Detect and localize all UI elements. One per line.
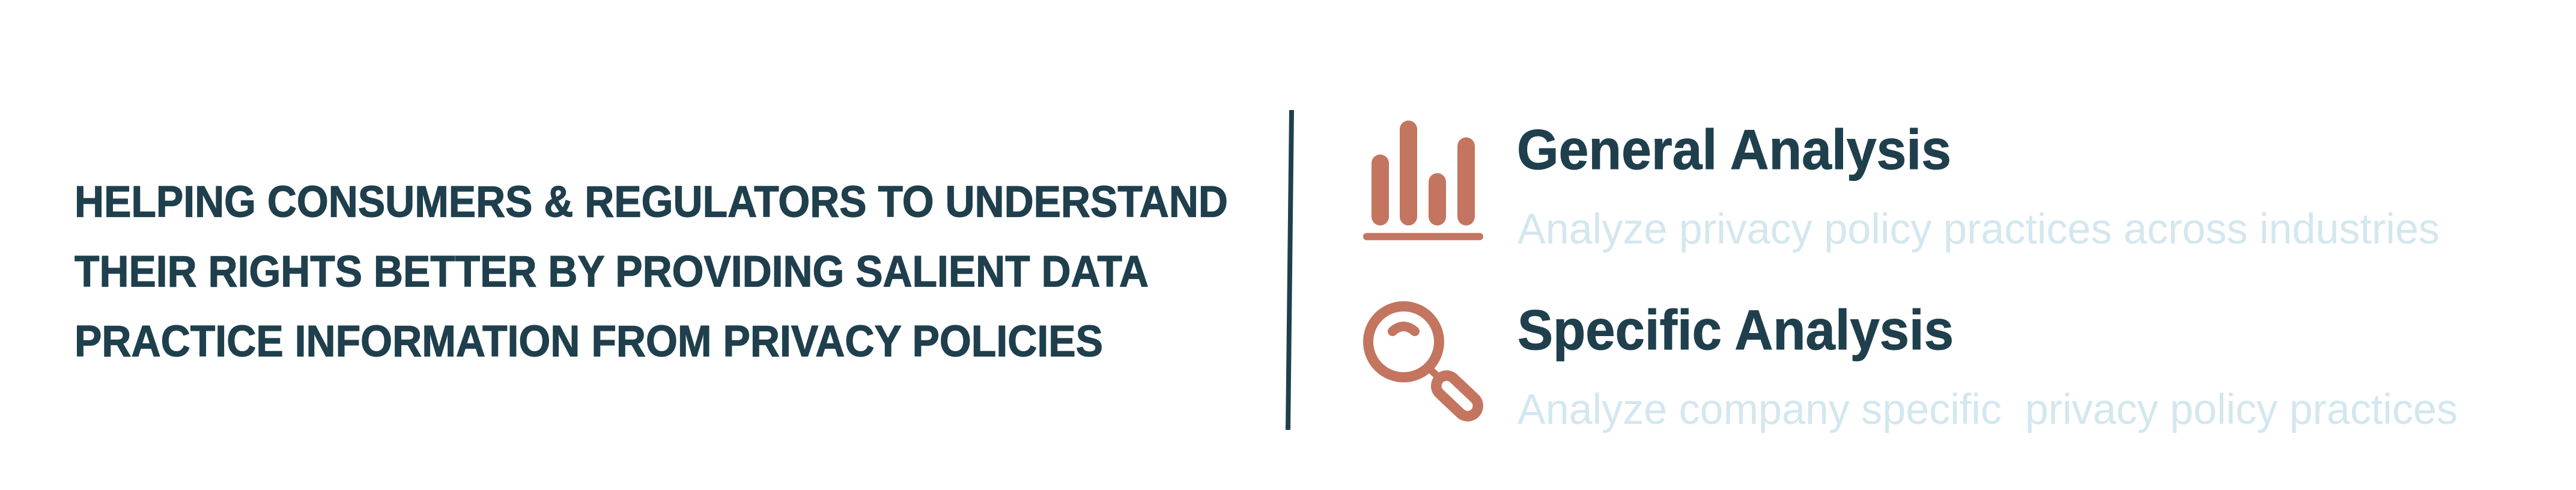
title text block: THEIR RIGHTS BETTER BY PROVIDING SALIENT DATA xyxy=(74,247,1149,296)
vertical divider xyxy=(1286,110,1294,430)
title text block xyxy=(74,177,1228,366)
heading: specific analysis: Specific Analysis xyxy=(1517,298,1954,361)
icon: bar chart xyxy=(1363,120,1483,240)
title text block: HELPING CONSUMERS & REGULATORS TO UNDERSTAND xyxy=(74,177,1228,226)
heading: general analysis: General Analysis xyxy=(1517,118,1951,181)
icon: magnifying glass xyxy=(1368,307,1468,406)
description: specific analysis: Analyze company specific privacy policy practices xyxy=(1517,386,2458,433)
title text block: PRACTICE INFORMATION FROM PRIVACY POLICIES xyxy=(74,316,1103,366)
description: general analysis: Analyze privacy policy practices across industries xyxy=(1517,206,2440,253)
